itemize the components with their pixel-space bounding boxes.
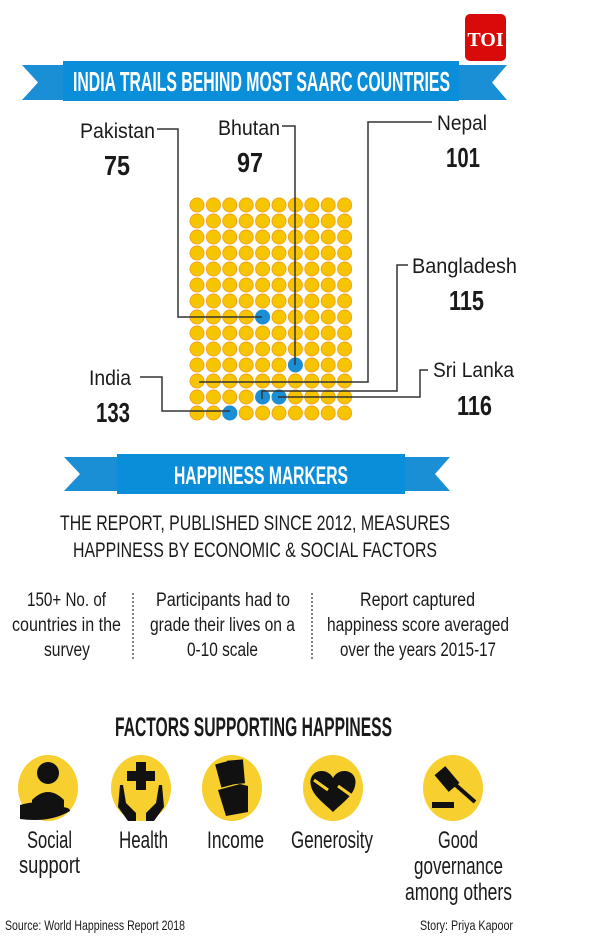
label: Nepal: 101 xyxy=(446,142,480,173)
label: Sri Lanka: 116 xyxy=(457,390,492,421)
label: Bhutan xyxy=(218,117,280,178)
source: Source: World Happiness Report 2018 xyxy=(5,917,185,933)
logo: TOI: TOI xyxy=(467,29,504,51)
label: Generosity: Generosity xyxy=(291,827,373,854)
label: Bhutan: 97 xyxy=(237,147,263,178)
intro text xyxy=(60,512,450,562)
fact: years: over the years 2015-17 xyxy=(340,640,496,661)
fact: years: Report captured xyxy=(360,590,475,611)
label: Bhutan: Bhutan xyxy=(218,117,280,140)
label: Social support: Social xyxy=(27,827,72,854)
label: India: India xyxy=(89,367,131,390)
label: Bangladesh: 115 xyxy=(449,285,484,316)
intro text: THE REPORT, PUBLISHED SINCE 2012, MEASURES xyxy=(60,512,450,535)
label: Sri Lanka xyxy=(433,359,514,421)
banner: happiness markers: HAPPINESS MARKERS xyxy=(174,462,348,490)
dot grid chart xyxy=(140,122,432,420)
credit: Story: Priya Kapoor xyxy=(420,917,513,933)
icon: social support xyxy=(18,755,78,821)
label: Good governance xyxy=(405,827,512,906)
fact: scale: 0-10 scale xyxy=(187,640,258,661)
label: Nepal xyxy=(437,112,487,173)
label: Nepal: Nepal xyxy=(437,112,487,135)
icon: income xyxy=(202,755,262,821)
fact: years: happiness score averaged xyxy=(327,615,509,636)
intro text: HAPPINESS BY ECONOMIC & SOCIAL FACTORS xyxy=(73,539,437,562)
fact: countries: survey xyxy=(44,640,90,661)
banner: title xyxy=(22,61,507,101)
label: Health: Health xyxy=(119,827,168,854)
label: Social support xyxy=(19,827,80,879)
label: Pakistan xyxy=(80,120,155,181)
heading: factors: FACTORS SUPPORTING HAPPINESS xyxy=(115,712,392,742)
label: Sri Lanka: Sri Lanka xyxy=(433,359,514,382)
label: Good governance: among others xyxy=(405,879,512,906)
fact: years xyxy=(327,590,509,661)
fact: countries: 150+ No. of xyxy=(27,590,107,611)
fact: countries xyxy=(12,590,121,661)
label: Bangladesh xyxy=(412,255,517,316)
fact: scale: Participants had to xyxy=(156,590,290,611)
icon: generosity xyxy=(303,755,363,821)
fact: scale xyxy=(150,590,295,661)
logo: TOI xyxy=(465,14,506,61)
label: Social support: support xyxy=(19,852,80,879)
label: Pakistan: 75 xyxy=(104,150,130,181)
label: Good governance: governance xyxy=(414,853,503,880)
fact: countries: countries in the xyxy=(12,615,121,636)
label: Good governance: Good xyxy=(438,827,478,854)
label: India: 133 xyxy=(96,397,130,428)
label: India xyxy=(89,367,131,428)
label: Income: Income xyxy=(207,827,264,854)
icon: governance gavel xyxy=(423,755,483,821)
label: Bangladesh: Bangladesh xyxy=(412,255,517,278)
banner: happiness markers xyxy=(64,454,450,494)
label: Pakistan: Pakistan xyxy=(80,120,155,143)
icon: health xyxy=(111,755,171,821)
fact: scale: grade their lives on a xyxy=(150,615,295,636)
